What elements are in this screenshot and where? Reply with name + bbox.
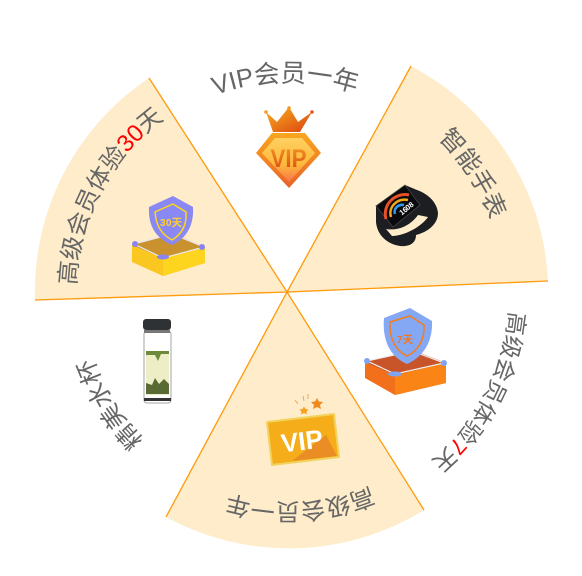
icon: smart watch: 16 <box>397 205 410 217</box>
wedge: smart watch <box>287 66 548 292</box>
icon: 7 day shield on orange platform: 7天 <box>397 334 414 346</box>
icon: VIP card: VIP <box>279 424 325 459</box>
label: smart watch: 智能手表 <box>440 126 507 219</box>
wedge: 30 day trial <box>35 78 287 300</box>
label: VIP one year: VIP会员一年 <box>210 62 358 93</box>
label: 7 day trial: 高级会员体验7天 <box>431 313 527 473</box>
wedge: VIP card <box>166 292 424 548</box>
label: VIP one year, bottom: 高级会员一年 <box>226 486 376 522</box>
icon: crown VIP badge: VIP <box>270 145 306 173</box>
icon: 7 day shield on orange platform <box>364 308 447 395</box>
icon: 30 day shield on yellow platform: 30天 <box>160 217 183 229</box>
icon: smart watch <box>376 185 438 246</box>
icon: 30 day shield on yellow platform <box>132 196 205 276</box>
label: water bottle: 精美水杯 <box>76 361 142 452</box>
icon: glass tea bottle <box>143 319 171 403</box>
icon: smart watch: 08 <box>403 200 416 212</box>
icon: crown VIP badge <box>256 106 321 188</box>
icon: VIP card <box>267 394 339 465</box>
label: 30 day trial: 高级会员体验30天 <box>56 106 164 284</box>
